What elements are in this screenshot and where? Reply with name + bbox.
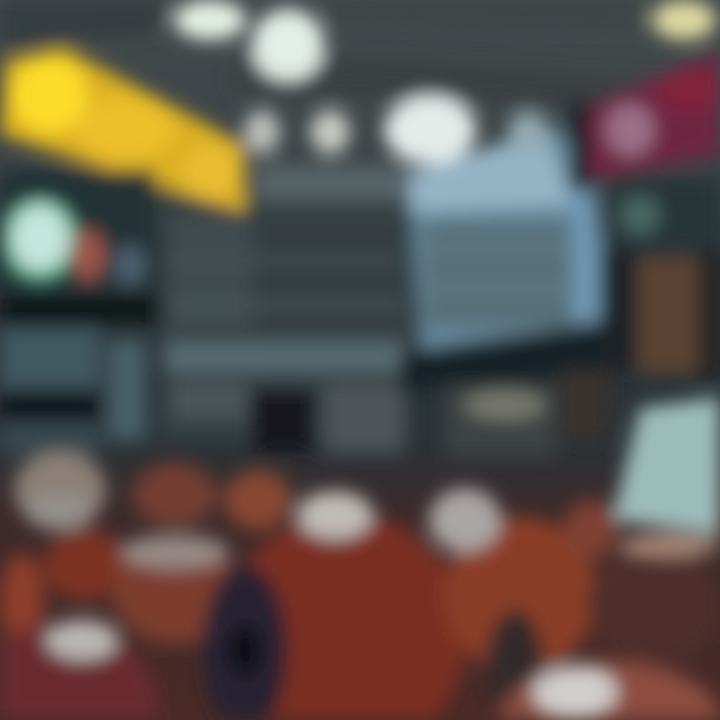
left side dark bands	[0, 296, 160, 455]
dark band under blue panel	[400, 325, 625, 457]
pale screen lower right	[612, 397, 720, 535]
blue screen panel	[410, 125, 610, 350]
left side green-white sign	[0, 170, 155, 290]
yellow sign	[0, 48, 245, 212]
ceiling lights	[174, 0, 716, 164]
crowd of basketballs	[0, 452, 720, 720]
central dark stands	[160, 165, 410, 453]
magenta sign	[570, 50, 720, 190]
ceiling beams	[0, 0, 660, 112]
right side stands	[600, 178, 720, 380]
